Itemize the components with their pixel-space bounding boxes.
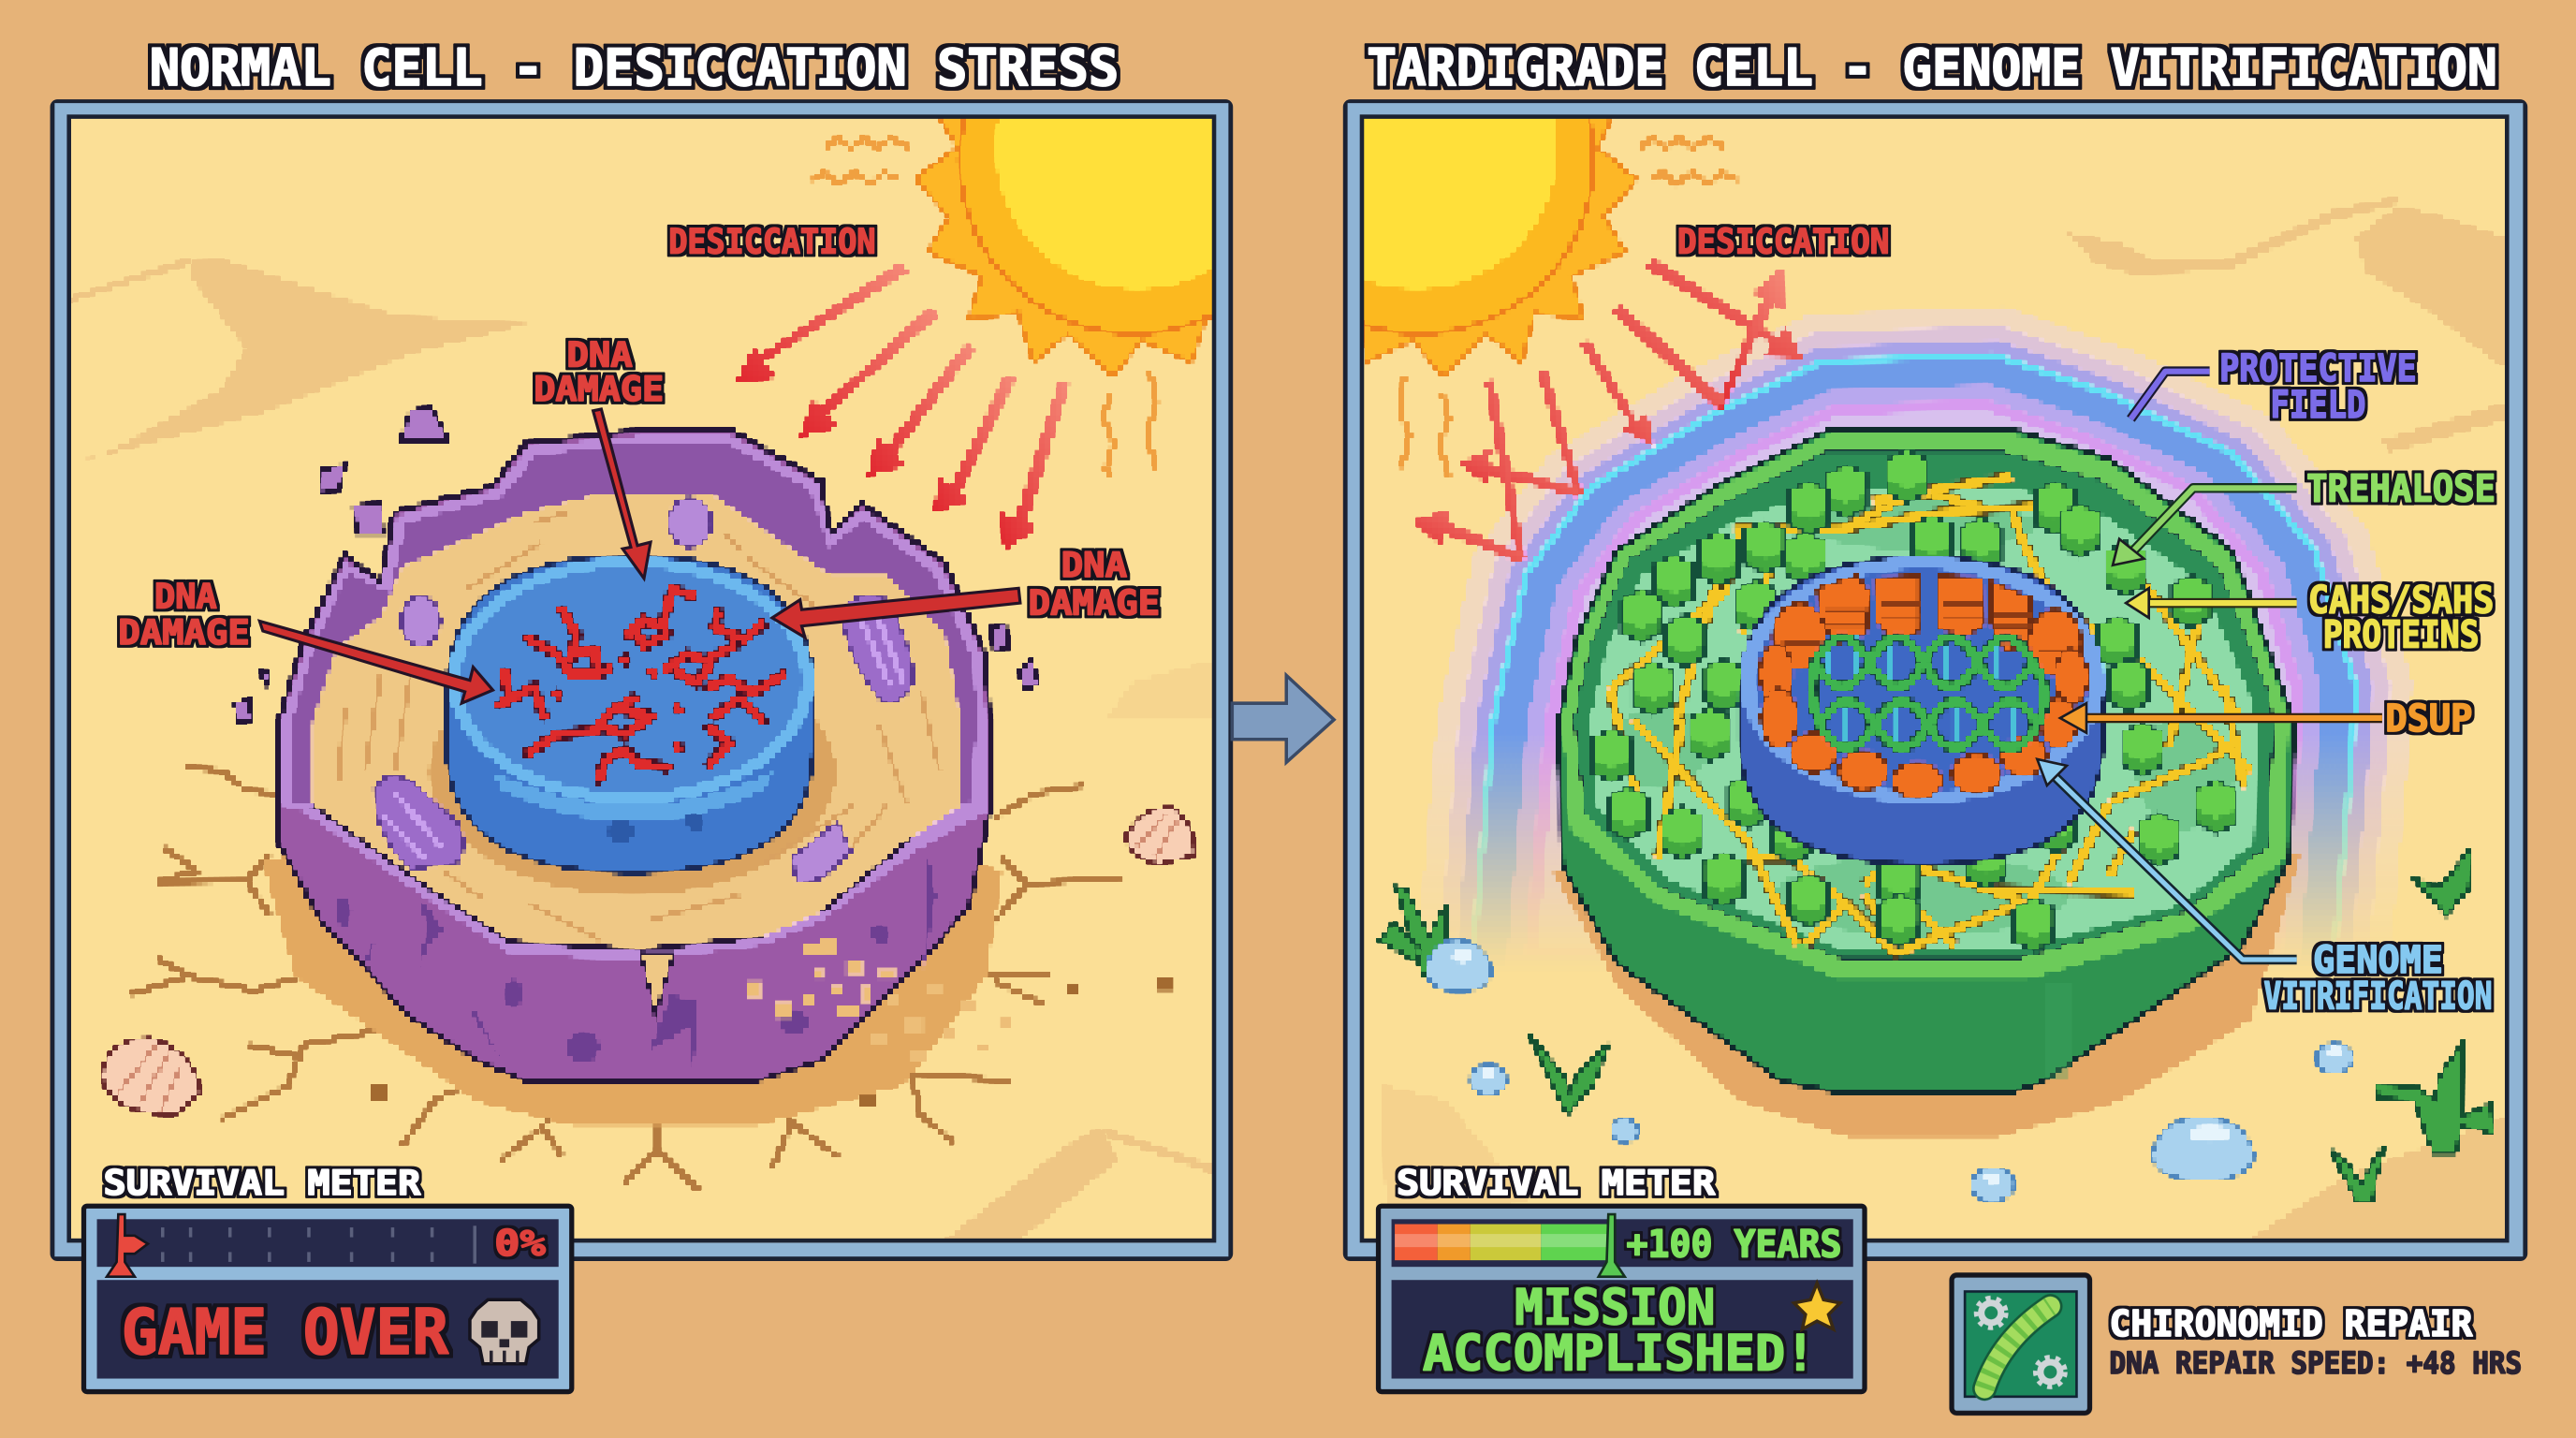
label: desiccation: DESICCATION <box>668 221 875 261</box>
sun <box>915 0 1308 376</box>
label: CAHS/SAHS proteins: PROTEINS <box>2323 613 2479 657</box>
cell shadow <box>1553 855 2300 1137</box>
callout arrowheads <box>2037 539 2149 785</box>
label: genome vitrification: GENOME <box>2313 938 2443 982</box>
label: CAHS/SAHS proteins <box>2308 579 2494 657</box>
panel frame <box>1345 102 2525 1258</box>
meter ticks <box>161 1225 476 1264</box>
arrow: normal to tardigrade <box>1232 675 1334 762</box>
game over text: GAME OVER <box>122 1296 449 1369</box>
floor mottling <box>1610 501 2234 936</box>
chironomid heading: CHIRONOMID REPAIR <box>2110 1303 2473 1345</box>
trehalose cubes <box>1592 450 2236 951</box>
icon: star <box>1794 1284 1840 1329</box>
meter track <box>1392 1219 1853 1267</box>
cracks in ground <box>131 768 1120 1190</box>
organelles <box>374 498 914 882</box>
result panel <box>1392 1280 1853 1379</box>
label: DNA damage top: DNA <box>567 334 633 374</box>
wall texture <box>2047 983 2070 1081</box>
panel: tardigrade cell <box>1245 0 2525 1258</box>
mission accomplished text: MISSION <box>1515 1280 1715 1337</box>
label: DNA damage right <box>1029 545 1160 623</box>
CAHS SAHS protein network <box>1610 477 2250 953</box>
water drops <box>1426 940 2352 1201</box>
Dsup stack stripes <box>1782 605 2073 651</box>
panel: normal cell <box>51 99 1234 1261</box>
chironomid detail: DNA REPAIR SPEED: +48 HRS <box>2110 1347 2522 1381</box>
plants <box>1380 848 2494 1201</box>
DNA helix <box>1812 638 2044 748</box>
wall damage <box>335 855 936 1068</box>
label: DNA damage top: DAMAGE <box>534 369 664 409</box>
cytoplasm texture <box>339 513 940 940</box>
mission accomplished text <box>1423 1280 1815 1383</box>
survival meter: normal cell <box>84 1163 572 1392</box>
front rim outline <box>312 805 912 949</box>
label: CAHS/SAHS proteins: CAHS/SAHS <box>2308 579 2494 623</box>
gradient bar <box>1395 1225 1606 1260</box>
chironomid repair badge <box>1952 1275 2089 1413</box>
label: genome vitrification <box>2264 938 2492 1019</box>
membrane fragments <box>235 407 1038 723</box>
label: DNA damage left: DNA <box>154 576 217 616</box>
protective field <box>1412 307 2412 1020</box>
mission accomplished text: ACCOMPLISHED! <box>1423 1326 1815 1383</box>
meter heading: SURVIVAL METER <box>104 1163 421 1203</box>
label: protective field: PROTECTIVE <box>2219 346 2417 390</box>
membrane rim <box>283 435 986 961</box>
sun <box>1245 0 1636 376</box>
meter heading: SURVIVAL METER <box>1397 1163 1716 1203</box>
broken cell <box>279 431 1010 1081</box>
years value: +100 YEARS <box>1627 1223 1841 1267</box>
icon background <box>1965 1292 2076 1397</box>
label: protective field: FIELD <box>2271 383 2365 427</box>
label: protective field <box>2219 346 2417 427</box>
survival meter: tardigrade cell <box>1379 1163 1865 1392</box>
meter needle <box>107 1214 148 1277</box>
heat waves <box>1399 138 1738 477</box>
deflected desiccation arrows <box>1412 258 1802 564</box>
label: DNA damage right: DAMAGE <box>1029 582 1160 623</box>
heading: tardigrade cell: TARDIGRADE CELL - GENOME VITRIFICATION <box>1367 38 2497 97</box>
nucleus with Dsup and DNA <box>1740 557 2104 864</box>
cell with vitrified interior <box>1559 429 2293 1093</box>
label: DNA damage top <box>534 334 664 409</box>
damaged DNA <box>500 590 782 779</box>
label: trehalose: TREHALOSE <box>2306 466 2496 510</box>
shells <box>102 808 1194 1116</box>
outer wall <box>1559 429 2293 1093</box>
callout leaders <box>2045 372 2382 960</box>
label: DNA damage left: DAMAGE <box>118 612 250 653</box>
heading: normal cell: NORMAL CELL - DESICCATION STRESS <box>150 38 1119 97</box>
label arrows: DNA damage <box>259 409 1020 703</box>
icon: gears <box>1976 1299 2065 1387</box>
nucleus <box>446 555 813 873</box>
cell shadow <box>264 856 1003 1127</box>
desiccation arrows <box>736 263 1070 550</box>
label: DNA damage right: DNA <box>1061 545 1127 585</box>
inner dark wall <box>1573 452 2274 958</box>
icon frame <box>1952 1275 2089 1413</box>
label: Dsup: DSUP <box>2385 697 2472 741</box>
sand dunes <box>1380 198 2507 1240</box>
percent value: 0% <box>494 1223 546 1265</box>
Dsup beads <box>1760 575 2088 799</box>
crumbling particles <box>748 936 1010 1062</box>
meter frame <box>1379 1206 1865 1392</box>
lime rim <box>1562 433 2289 979</box>
result panel <box>97 1280 559 1379</box>
icon: skull <box>470 1299 539 1364</box>
cytoplasm <box>312 496 961 949</box>
panel frame <box>52 102 1231 1258</box>
icon: larva <box>1984 1306 2050 1388</box>
stones <box>372 977 1171 1106</box>
shell ribs <box>118 814 1177 1110</box>
label: DNA damage left <box>118 576 250 653</box>
mint floor <box>1590 488 2258 949</box>
meter frame <box>84 1206 572 1392</box>
label: genome vitrification: VITRIFICATION <box>2264 975 2492 1019</box>
heat waves <box>812 138 1157 477</box>
drop highlights <box>1453 949 2341 1183</box>
label: desiccation: DESICCATION <box>1677 221 1889 261</box>
meter needle <box>1599 1214 1625 1277</box>
sand dunes <box>69 258 1216 1240</box>
cytoplasm darker ring <box>429 649 836 896</box>
front wall notch <box>640 953 674 1016</box>
inner back wall <box>291 442 977 805</box>
meter track <box>97 1219 559 1267</box>
outer membrane wall <box>279 431 989 1081</box>
